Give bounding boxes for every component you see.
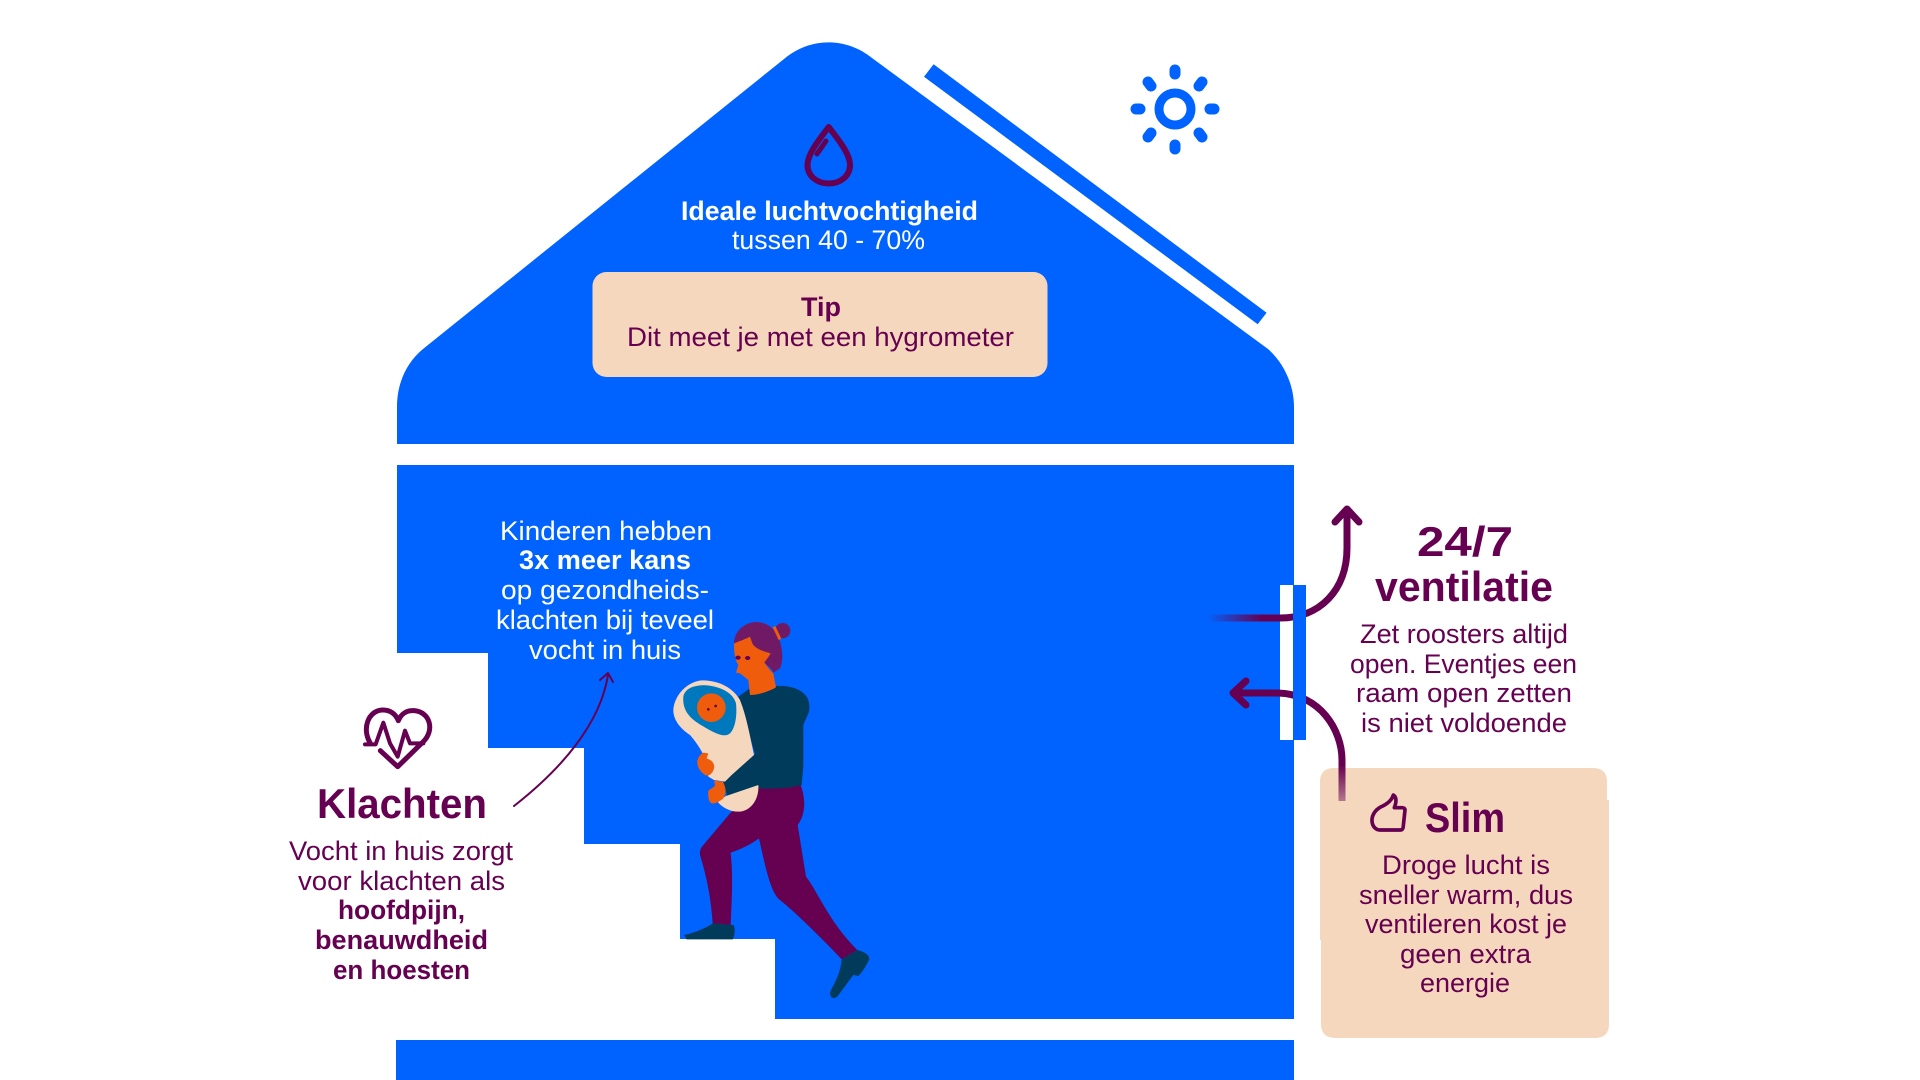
- hair tie: [774, 627, 780, 639]
- text: children risk: Kinderen hebben: [500, 516, 712, 546]
- house body with stairs: [397, 465, 1294, 1019]
- text: complaints: Vocht in huis zorgt: [289, 836, 513, 866]
- text: Slim body: sneller warm, dus: [1359, 880, 1573, 910]
- icon: sun: [1136, 70, 1214, 149]
- text: Slim body: [1359, 850, 1573, 998]
- hair bun: [775, 623, 790, 638]
- text: ventilation advice: Zet roosters altijd: [1360, 619, 1568, 649]
- icon: thumbs up: [1372, 795, 1405, 830]
- text: complaints: voor klachten als: [298, 866, 505, 896]
- torso: [723, 686, 809, 797]
- house foundation band: [396, 1040, 1294, 1080]
- heading: ideal humidity: Ideale luchtvochtigheid: [681, 196, 978, 226]
- hair: [734, 622, 782, 673]
- panel: tip: Tip: [801, 292, 841, 322]
- text: ventilation advice: [1350, 619, 1577, 738]
- text: Slim body: ventileren kost je: [1365, 909, 1567, 939]
- text: children risk: op gezondheids-: [501, 575, 709, 605]
- panel: tip: [592, 272, 1048, 377]
- panel: Slim box: [1320, 768, 1609, 1038]
- heading: Klachten: Klachten: [317, 780, 487, 827]
- text: complaints: [289, 836, 513, 985]
- text: ventilation advice: is niet voldoende: [1361, 708, 1567, 738]
- heading: ideal humidity: [681, 196, 978, 255]
- baby blanket: [673, 680, 758, 812]
- text: Slim body: geen extra: [1400, 939, 1532, 969]
- window vent blue: [1293, 585, 1306, 740]
- text: complaints: hoofdpijn,: [338, 895, 465, 925]
- woman's head: [734, 637, 776, 695]
- thin arrow: complaints to children: [514, 673, 613, 806]
- text: ventilation advice: open. Eventjes een: [1350, 649, 1577, 679]
- panel: tip: Dit meet je met een hygrometer: [627, 322, 1014, 352]
- heading: 24/7 ventilatie: [1375, 518, 1553, 610]
- text: children risk: vocht in huis: [529, 635, 681, 665]
- text: complaints: en hoesten: [333, 955, 470, 985]
- illustration: mother carrying baby on stairs: [673, 622, 869, 998]
- baby eyes: [707, 705, 717, 711]
- heading: 24/7 ventilatie: ventilatie: [1375, 563, 1553, 610]
- baby hood: [683, 685, 736, 735]
- skylight bar: [924, 64, 1267, 324]
- arrow: air out: [1207, 509, 1359, 618]
- icon: water drop: [808, 127, 850, 184]
- heading: Slim: Slim: [1425, 794, 1505, 841]
- text: children risk: klachten bij teveel: [496, 605, 714, 635]
- roof panel: [397, 42, 1294, 444]
- hands: [697, 753, 726, 803]
- window vent white: [1280, 585, 1293, 740]
- text: children risk: [496, 516, 714, 665]
- text: Slim body: energie: [1420, 968, 1510, 998]
- heading: ideal humidity: tussen 40 - 70%: [732, 225, 925, 255]
- text: Slim body: Droge lucht is: [1382, 850, 1550, 880]
- text: ventilation advice: raam open zetten: [1356, 678, 1572, 708]
- shoes: [684, 923, 869, 998]
- eyes: [735, 656, 750, 660]
- icon: heart with pulse: [365, 710, 430, 767]
- legs: [700, 785, 857, 959]
- baby face: [697, 693, 726, 722]
- heading: 24/7 ventilatie: 24/7: [1417, 518, 1513, 565]
- text: complaints: benauwdheid: [315, 925, 488, 955]
- arrow: air in: [1233, 681, 1342, 801]
- text: children risk: 3x meer kans: [519, 545, 691, 575]
